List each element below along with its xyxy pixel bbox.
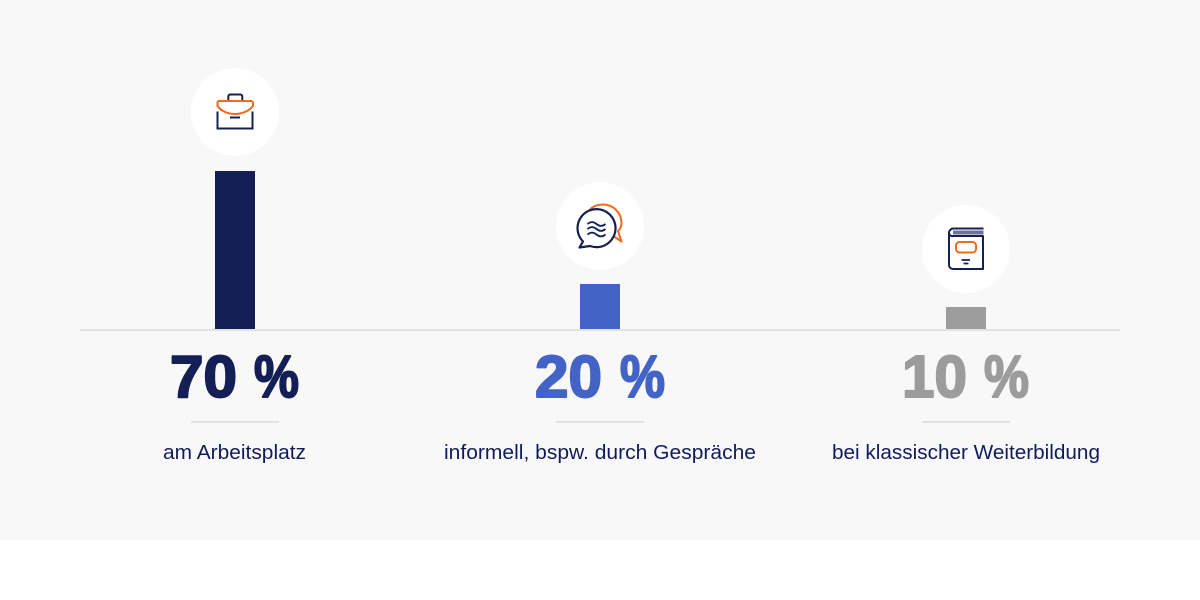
value: 70 %: 70 — [170, 344, 237, 410]
value: 20 % — [535, 344, 665, 410]
value: 20 %: 20 — [535, 344, 602, 410]
icon: speech bubbles — [556, 182, 644, 270]
value: 70 % — [170, 344, 299, 410]
label: am Arbeitsplatz: am Arbeitsplatz — [163, 442, 306, 464]
icon: briefcase — [191, 68, 279, 156]
label: informell, bspw. durch Gespräche: informell, bspw. durch Gespräche — [444, 442, 756, 464]
value: 10 %: 10 — [902, 344, 967, 410]
icon: book — [922, 205, 1010, 293]
bar: 20 % — [580, 284, 620, 329]
value: 20 %: % — [620, 344, 665, 410]
bar: 70 % — [215, 171, 255, 329]
bar: 10 % — [946, 307, 986, 329]
value: 10 %: % — [984, 344, 1029, 410]
label: bei klassischer Weiterbildung: bei klassischer Weiterbildung — [832, 442, 1100, 464]
value: 70 %: % — [254, 344, 299, 410]
value: 10 % — [902, 344, 1029, 410]
